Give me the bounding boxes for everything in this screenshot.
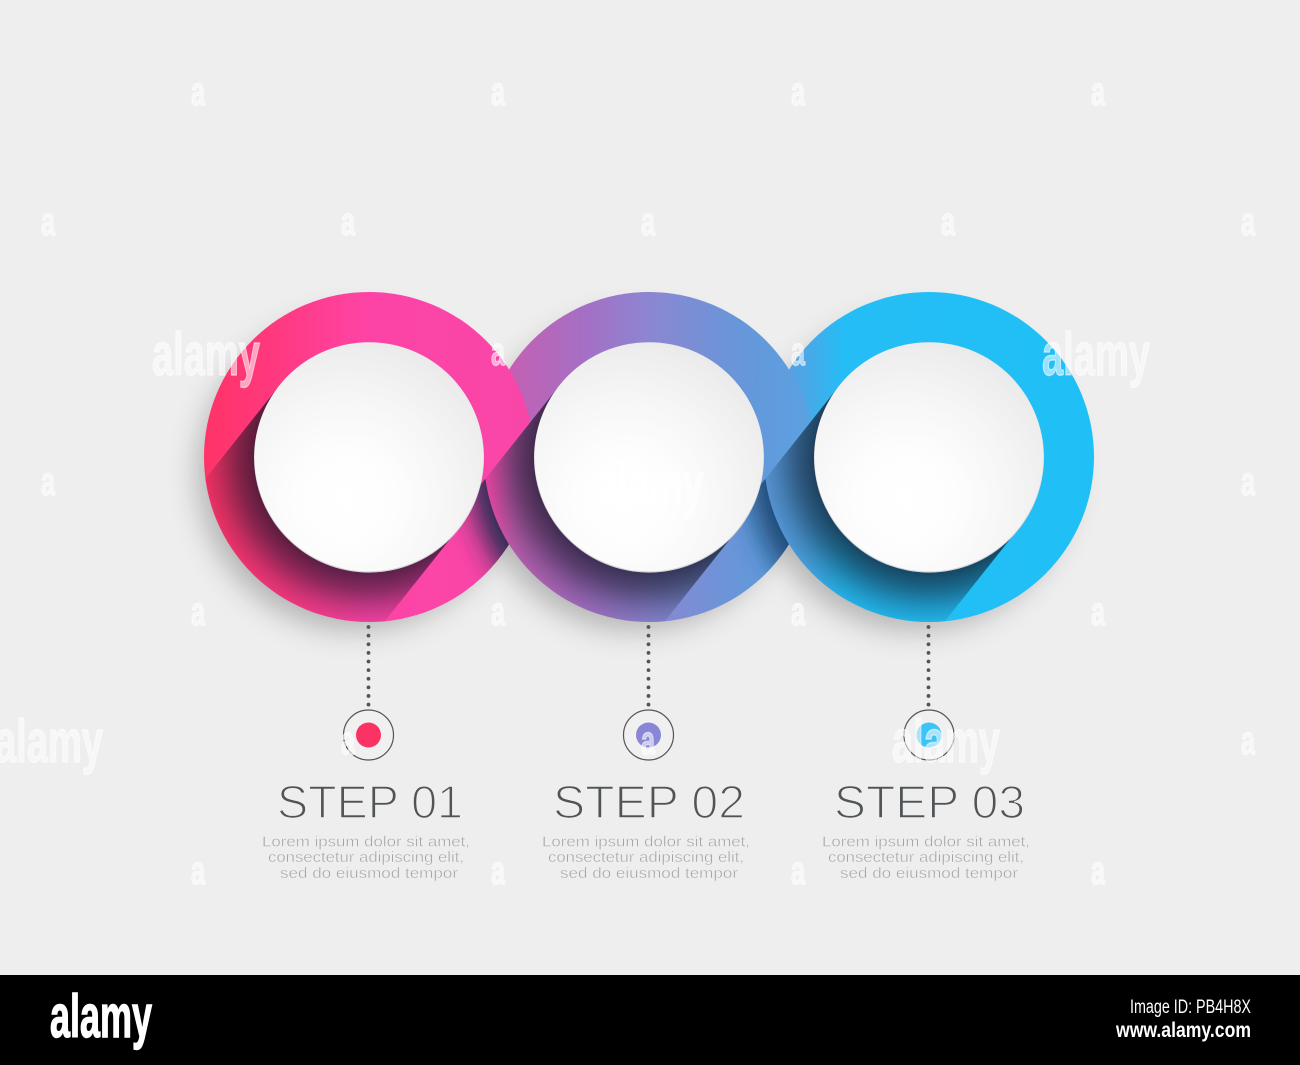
watermarks: a bbox=[791, 330, 805, 374]
watermarks: a bbox=[1091, 590, 1105, 634]
website: www.alamy.com bbox=[1115, 1019, 1251, 1042]
watermarks: a bbox=[491, 590, 505, 634]
image id: Image ID: PB4H8X bbox=[1130, 997, 1251, 1018]
marker 1 bbox=[344, 710, 394, 760]
watermarks: a bbox=[1241, 460, 1255, 504]
watermarks: a bbox=[191, 590, 205, 634]
watermarks: a bbox=[791, 849, 805, 893]
ring 2: purple to blue bbox=[484, 292, 814, 622]
watermarks: alamy bbox=[892, 708, 1000, 775]
watermarks: alamy bbox=[152, 321, 260, 388]
watermarks: a bbox=[641, 719, 655, 763]
step 2 heading: STEP 02 bbox=[553, 776, 745, 828]
step 1 description: sed do eiusmod tempor bbox=[280, 865, 458, 882]
shadow of ring 2 on ring 1 bbox=[457, 364, 509, 578]
step 2 description: Lorem ipsum dolor sit amet, bbox=[542, 834, 750, 850]
watermarks: a bbox=[791, 70, 805, 114]
dotted connector 3 bbox=[927, 627, 930, 705]
watermarks: a bbox=[1241, 200, 1255, 244]
shadow of ring 3 on ring 2 bbox=[740, 358, 789, 575]
white plate 3 bbox=[814, 342, 1044, 573]
watermarks: a bbox=[941, 200, 955, 244]
watermarks: a bbox=[491, 849, 505, 893]
dotted connector 2 bbox=[647, 627, 650, 705]
step 1 heading: STEP 01 bbox=[277, 776, 463, 828]
step 3 heading: STEP 03 bbox=[834, 776, 1025, 828]
drop shadows under rings bbox=[197, 315, 1073, 631]
white plate 2 bbox=[534, 342, 764, 573]
watermarks: a bbox=[41, 460, 55, 504]
watermarks: a bbox=[791, 590, 805, 634]
watermarks: a bbox=[41, 200, 55, 244]
step 3 description: consectetur adipiscing elit, bbox=[828, 849, 1024, 866]
watermarks: a bbox=[341, 200, 355, 244]
ring 3: cyan bbox=[764, 292, 1094, 622]
watermarks: a bbox=[1241, 719, 1255, 763]
watermarks: a bbox=[491, 70, 505, 114]
step 1 description: Lorem ipsum dolor sit amet, bbox=[262, 834, 470, 850]
step 2 description bbox=[542, 834, 750, 882]
footer logo: alamy bbox=[50, 983, 152, 1050]
ring 2 overlap passing over ring 3 bbox=[740, 319, 810, 484]
watermarks: a bbox=[341, 719, 355, 763]
watermarks bbox=[0, 70, 1255, 893]
step 3 description: Lorem ipsum dolor sit amet, bbox=[822, 834, 1030, 850]
watermarks: alamy bbox=[0, 708, 103, 775]
watermarks: alamy bbox=[1042, 321, 1150, 388]
dotted connector 1 bbox=[367, 627, 370, 705]
watermarks: a bbox=[1091, 849, 1105, 893]
watermarks: a bbox=[491, 330, 505, 374]
watermarks: a bbox=[191, 849, 205, 893]
step 1 description bbox=[262, 834, 470, 882]
watermarks: alamy bbox=[596, 451, 704, 518]
marker 3 bbox=[904, 710, 954, 760]
step 2 description: consectetur adipiscing elit, bbox=[548, 849, 744, 866]
watermarks: a bbox=[1091, 70, 1105, 114]
footer bar bbox=[0, 975, 1300, 1065]
step 2 description: sed do eiusmod tempor bbox=[560, 865, 738, 882]
ring 1 overlap passing over ring 2 bbox=[459, 318, 530, 485]
step 3 description bbox=[822, 834, 1030, 882]
ring 1: pink bbox=[204, 292, 534, 622]
white plate 1 bbox=[254, 342, 484, 573]
step 3 description: sed do eiusmod tempor bbox=[840, 865, 1018, 882]
step 1 description: consectetur adipiscing elit, bbox=[268, 849, 464, 866]
watermarks: a bbox=[641, 200, 655, 244]
marker 2 bbox=[624, 710, 674, 760]
watermarks: a bbox=[191, 70, 205, 114]
